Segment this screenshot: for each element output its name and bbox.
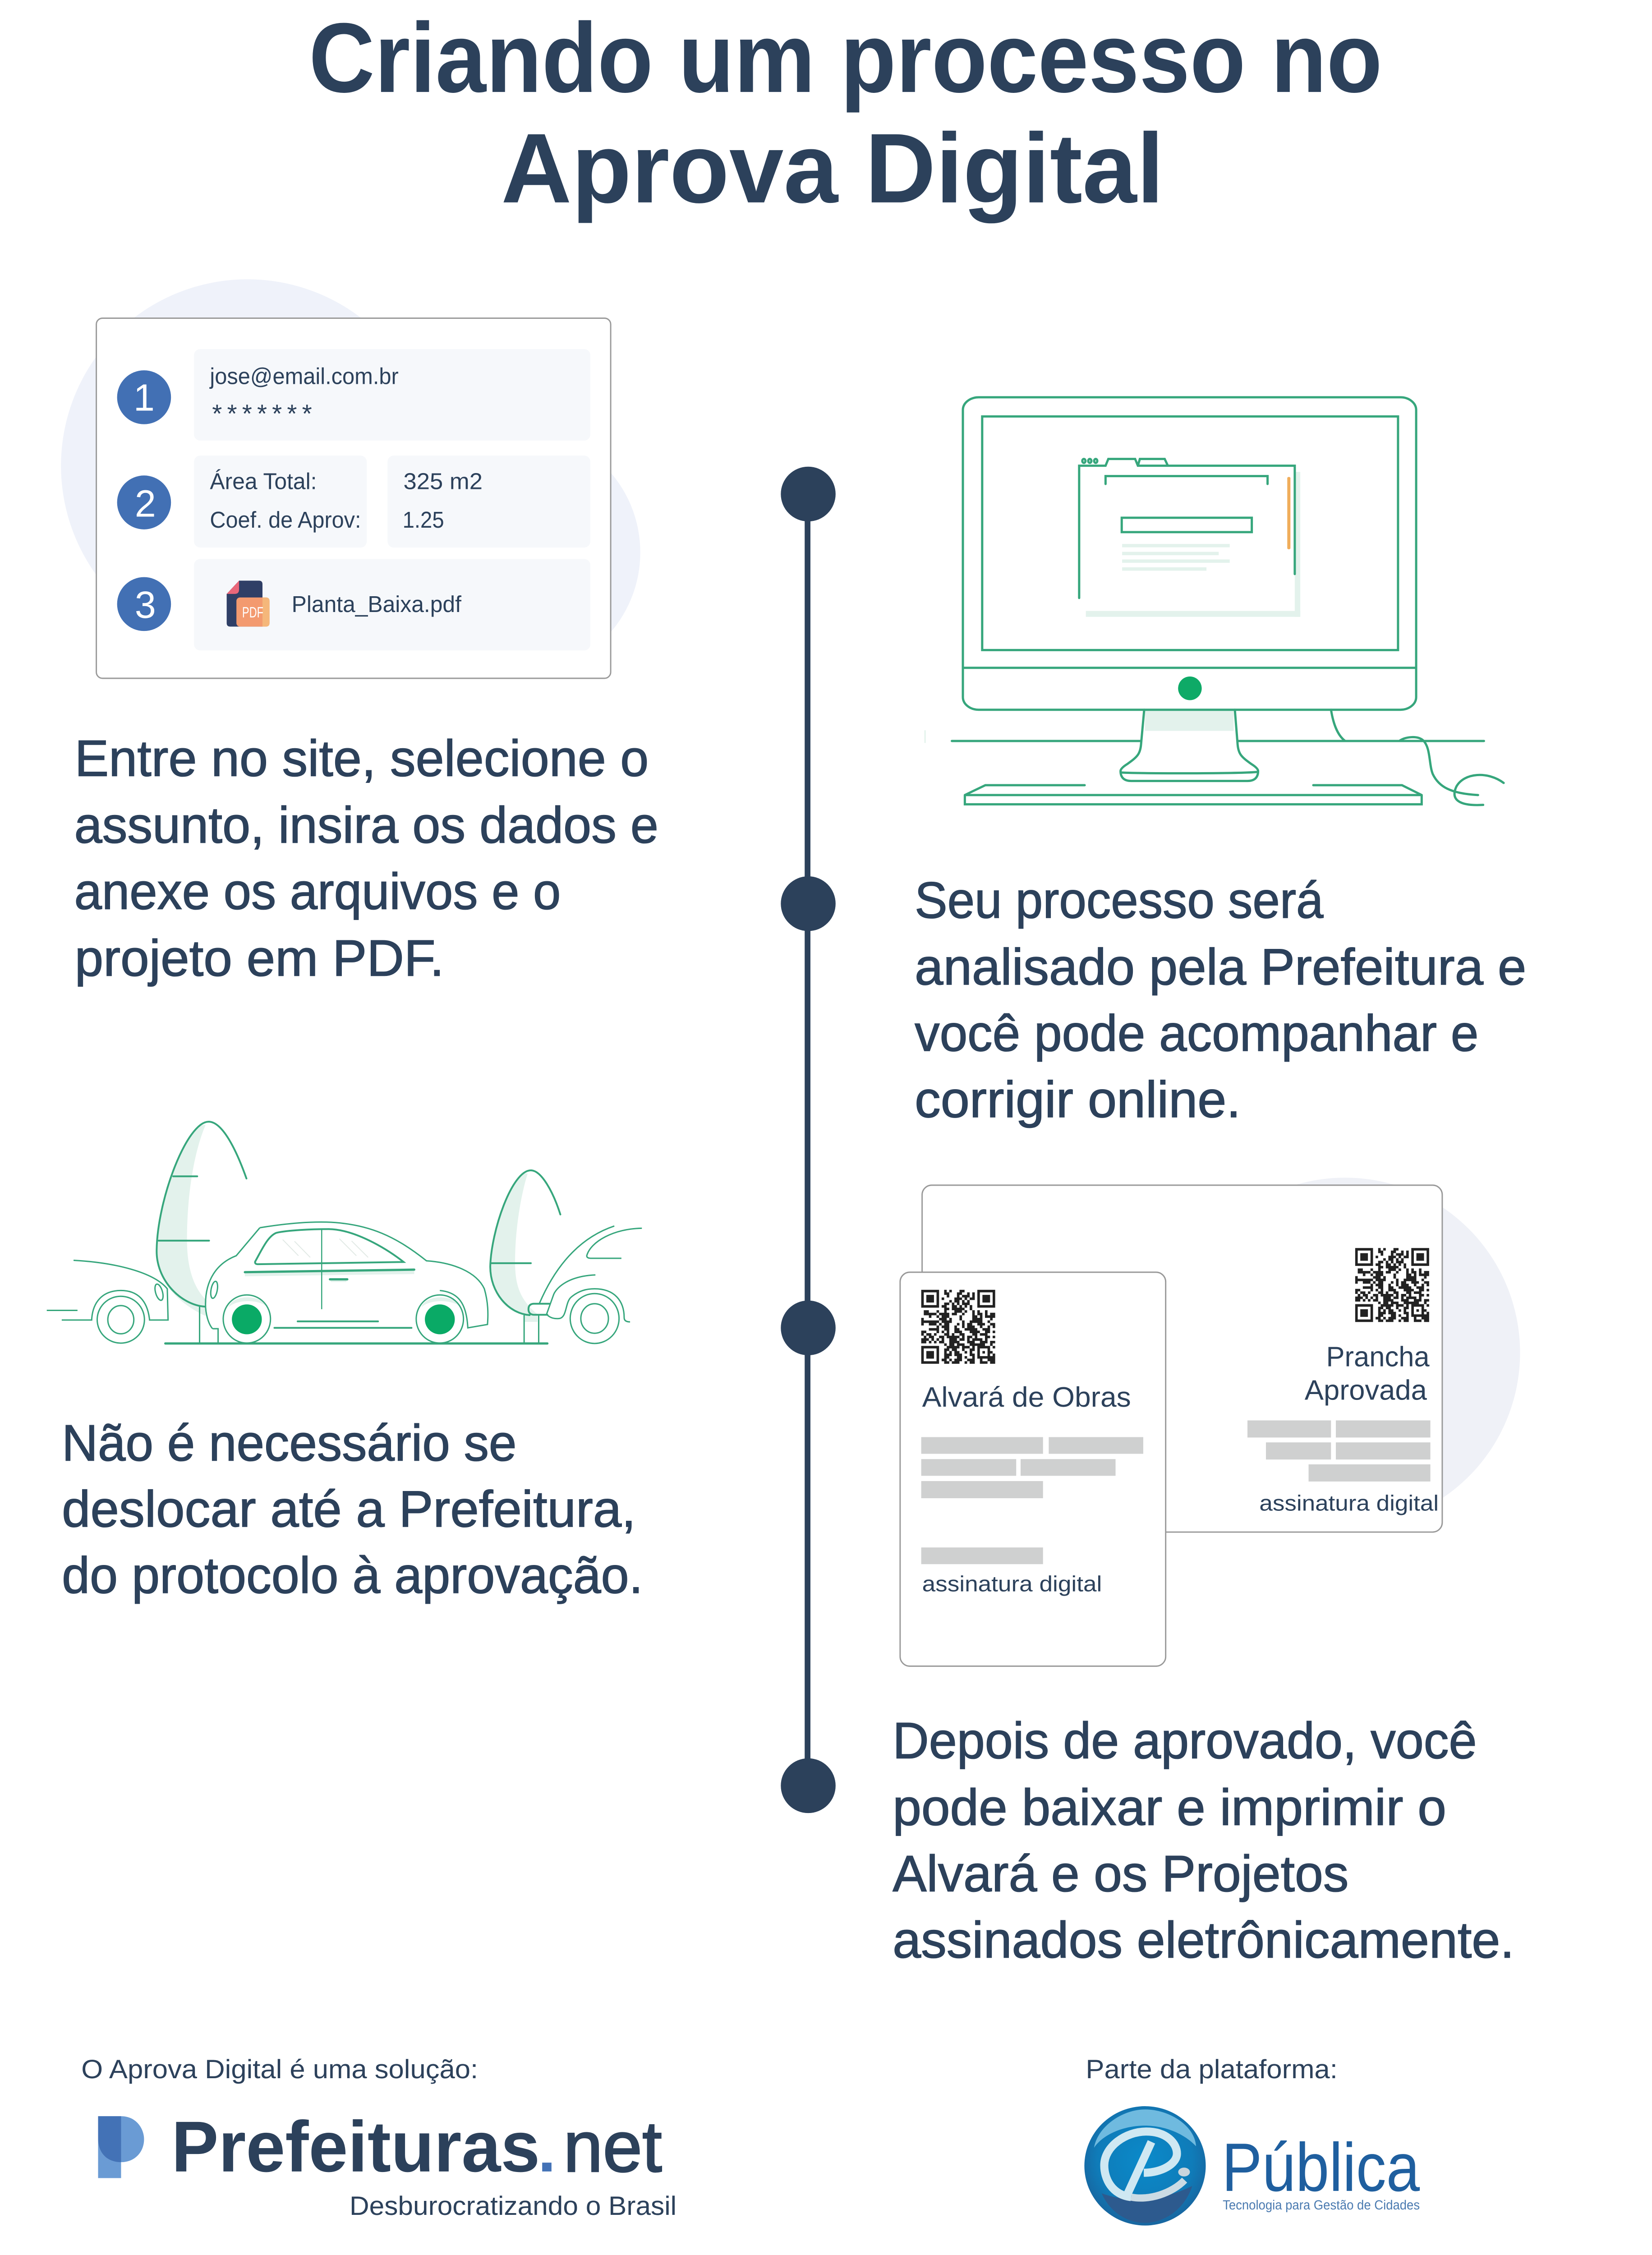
logo: Prefeituras.net: net (563, 2106, 662, 2187)
timeline (781, 467, 836, 1813)
text block: step 1: anexe os arquivos e o (74, 863, 561, 920)
panel: form card illustration: Coef. de Aprov: (210, 507, 361, 533)
logo: Pública (1084, 2106, 1420, 2226)
text block: step 1 (74, 730, 658, 987)
panel: approved documents (900, 1178, 1520, 1666)
text block: platform label: Parte da plataforma: (1086, 2054, 1338, 2084)
card: prancha aprovada: Prancha (1326, 1341, 1430, 1372)
logo: Prefeituras.net: Desburocratizando o Brasil (350, 2191, 676, 2221)
card: prancha aprovada: assinatura digital (1259, 1491, 1439, 1515)
card: alvara de obras: assinatura digital (922, 1572, 1102, 1596)
panel: form card illustration: PDF (242, 604, 263, 621)
title: Aprova Digital (501, 113, 1164, 224)
text block: step 3: do protocolo à aprovação. (62, 1546, 643, 1604)
title: Criando um processo no (309, 3, 1382, 113)
card: prancha aprovada: Aprovada (1305, 1374, 1427, 1406)
text block: step 2: corrigir online. (915, 1071, 1241, 1128)
card: prancha aprovada (922, 1185, 1442, 1532)
text block: step 3: Não é necessário se (62, 1414, 516, 1472)
text block: solution label: O Aprova Digital é uma solução: (81, 2054, 478, 2084)
title (309, 3, 1382, 224)
text block: step 4: Depois de aprovado, você (893, 1712, 1477, 1769)
logo: Pública: Tecnologia para Gestão de Cidades (1223, 2198, 1420, 2213)
text block: step 4: Alvará e os Projetos (893, 1845, 1348, 1902)
panel: form card illustration: 2 (135, 483, 156, 525)
logo: Prefeituras.net: Prefeituras (171, 2106, 540, 2187)
panel: form card illustration: 1.25 (403, 507, 444, 533)
panel: form card illustration: 325 m2 (404, 469, 483, 494)
panel: form card illustration: ******* (212, 400, 312, 428)
panel: form card illustration: jose@email.com.br (209, 364, 399, 389)
text block: step 2: você pode acompanhar e (915, 1004, 1478, 1062)
card: alvara de obras (900, 1272, 1166, 1666)
text block: step 2: Seu processo será (915, 871, 1324, 929)
icon: cars and trees (47, 1122, 642, 1344)
text block: step 4: assinados eletrônicamente. (893, 1911, 1514, 1969)
text block: step 1: assunto, insira os dados e (74, 796, 658, 854)
text block: step 3 (62, 1414, 643, 1604)
text block: step 4: pode baixar e imprimir o (893, 1779, 1446, 1836)
panel: form card illustration (61, 279, 640, 678)
logo: Prefeituras.net (98, 2106, 676, 2221)
text block: step 3: deslocar até a Prefeitura, (62, 1480, 636, 1538)
text block: step 4 (893, 1712, 1514, 1969)
text block: step 1: projeto em PDF. (75, 930, 444, 987)
text block: step 2: analisado pela Prefeitura e (915, 938, 1526, 996)
panel: form card illustration: 1 (133, 377, 155, 419)
text block: step 2 (915, 871, 1526, 1128)
logo: Pública: Pública (1222, 2129, 1420, 2205)
panel: form card illustration: 3 (135, 584, 156, 626)
text block: step 1: Entre no site, selecione o (75, 730, 649, 787)
card: alvara de obras: Alvará de Obras (922, 1381, 1131, 1413)
icon: Pública ball (1084, 2106, 1206, 2226)
icon: computer monitor (925, 397, 1504, 805)
panel: form card illustration: Planta_Baixa.pdf (292, 592, 461, 617)
panel: form card illustration: Área Total: (210, 469, 317, 494)
